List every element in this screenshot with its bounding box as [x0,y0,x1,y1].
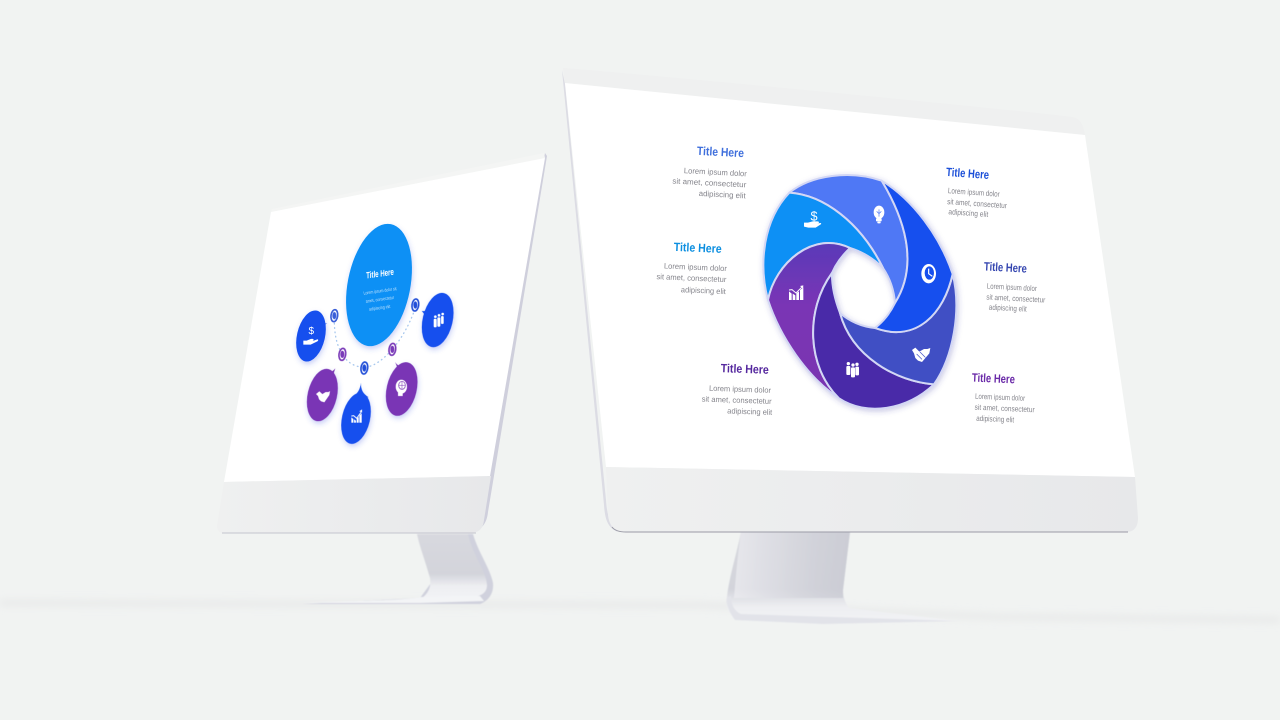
label: middle right: sit amet, consectetur [986,293,1046,305]
label: top right [943,165,1010,220]
label: middle right: Lorem ipsum dolor [987,282,1037,293]
icon: handshake [912,348,930,362]
bubble: handshake [302,366,343,424]
label: bottom right: sit amet, consectetur [974,403,1035,414]
small monitor [217,153,547,604]
floor line [0,603,1280,620]
bubble: dollar hand [292,308,330,364]
label: middle left [656,239,729,296]
label: middle right: Title Here [984,259,1027,276]
central bubble text: adipiscing elit [369,304,391,312]
large monitor chin [606,467,1138,532]
label: top right: adipiscing elit [948,207,989,219]
small monitor stand [302,534,493,604]
large monitor screen [565,83,1135,477]
bubble: head [381,359,422,419]
label: bottom left [701,361,775,417]
small monitor back edge [478,153,547,530]
label: top left: adipiscing elit [699,189,747,200]
label: top left [672,143,749,200]
small monitor diagram [292,218,459,447]
label: middle right [982,259,1048,315]
label: bottom left: Title Here [721,361,769,377]
label: top left: sit amet, consectetur [672,177,747,189]
large monitor stand [726,532,958,624]
target markers [330,299,419,374]
label: middle left: Title Here [673,240,722,256]
large monitor spiral diagram [763,175,956,409]
label: bottom left: adipiscing elit [727,406,773,417]
large monitor top bezel [563,68,1085,135]
icon: growth chart [789,285,803,300]
label: middle left: adipiscing elit [681,285,727,296]
label: top left: Title Here [697,144,745,160]
segment: periwinkle [789,175,908,303]
label: top right: Lorem ipsum dolor [948,186,1000,199]
label: middle right: adipiscing elit [989,303,1028,314]
label: bottom right: adipiscing elit [976,414,1015,424]
connector dotted line [334,312,414,367]
segment: indigo [840,274,956,384]
label: middle left: Lorem ipsum dolor [664,261,727,273]
segment: cyan blue [763,193,883,300]
segment: purple [768,243,850,398]
label: bottom left: sit amet, consectetur [702,394,772,406]
icon: light bulb [874,206,884,223]
small monitor chin [217,476,491,533]
label: top right: Title Here [946,165,990,182]
label: bottom right: Title Here [972,371,1015,386]
bubble: dollar hand: $ [309,326,315,337]
label: top right: sit amet, consectetur [947,197,1008,210]
segment: royal blue [875,181,953,332]
small monitor top bezel [271,153,545,212]
bubble: chart [337,383,375,447]
central bubble text: Title Here [365,267,394,281]
central bubble text [360,267,400,312]
label: top left: Lorem ipsum dolor [684,166,747,178]
central bubble text: Lorem ipsum dolor sit [363,286,397,296]
small monitor screen [224,158,545,482]
icon: clock phone [921,264,936,283]
segment: deep purple [813,273,934,409]
large monitor back edge [562,70,618,532]
central bubble text: amet, consectetur [365,295,395,304]
central bubble [336,218,422,352]
large monitor [562,68,1138,624]
label: bottom left: Lorem ipsum dolor [709,384,772,395]
label: bottom right [970,371,1037,425]
label: bottom right: Lorem ipsum dolor [975,392,1026,403]
icon: dollar hand [804,210,821,228]
label: middle left: sit amet, consectetur [656,272,727,284]
icon: dollar hand: $ [810,210,818,224]
bubble: people [417,290,459,350]
icon: people [846,362,859,377]
